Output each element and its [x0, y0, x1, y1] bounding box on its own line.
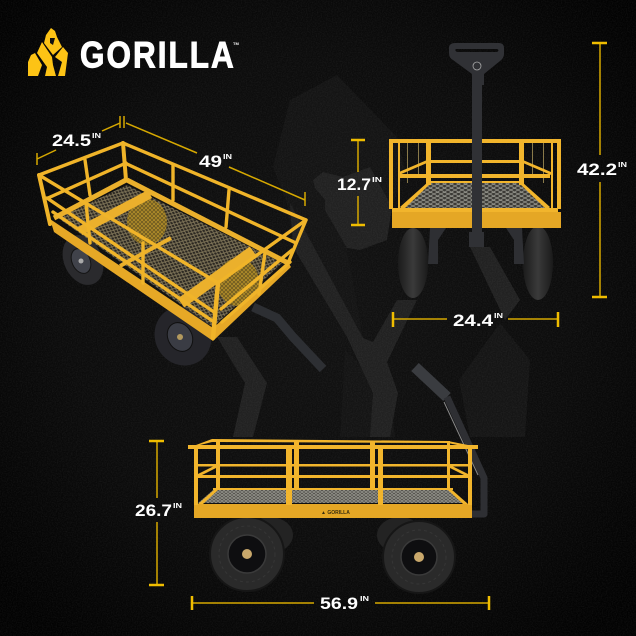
deck mesh — [403, 183, 548, 210]
dimension lines — [37, 43, 607, 610]
mesh deck — [58, 185, 282, 327]
back wheels — [247, 517, 293, 553]
label: 12.7 in: IN — [372, 177, 382, 184]
label: 24.4 in — [453, 311, 503, 330]
dim: 12.7 — [351, 140, 365, 225]
frame — [389, 139, 561, 228]
gorilla silhouette watermark — [217, 75, 530, 437]
wheels seen through mesh — [127, 199, 167, 245]
icon: gorilla — [28, 28, 68, 76]
measurement labels — [52, 131, 627, 613]
label: 12.7 in: 12.7 — [337, 175, 371, 194]
deck mesh — [198, 490, 467, 503]
rails — [188, 439, 478, 505]
label: 24.5 in: IN — [92, 133, 101, 140]
dim: 24.5 width — [37, 116, 120, 165]
front wheels — [210, 517, 455, 593]
dim: 26.7 — [149, 441, 164, 585]
label: 42.2 in: 42.2 — [577, 160, 617, 179]
logo — [28, 28, 239, 76]
side-view wagon — [188, 367, 484, 593]
bed side panel — [194, 504, 472, 518]
axle brackets — [428, 228, 524, 264]
dim: 24.4 — [393, 312, 558, 327]
pull handle — [253, 307, 323, 369]
bed logo: ▲ GORILLA — [321, 510, 350, 516]
dim: 49 length — [124, 116, 305, 206]
logo: TM — [233, 41, 239, 46]
dim: 42.2 — [592, 43, 607, 297]
pull handle — [415, 367, 484, 514]
label: 49 in: 49 — [199, 152, 222, 171]
deck frame — [54, 180, 288, 303]
label: 26.7 in: 26.7 — [135, 501, 172, 520]
front-view wagon — [389, 43, 561, 300]
label: 24.4 in: IN — [494, 313, 503, 320]
rails — [39, 143, 306, 338]
handle — [449, 43, 504, 247]
label: 56.9 in: IN — [360, 596, 369, 603]
label: 24.5 in: 24.5 — [52, 131, 91, 150]
label: 49 in: IN — [223, 154, 232, 161]
label: 42.2 in: IN — [618, 162, 627, 169]
wheels — [55, 228, 222, 376]
label: 26.7 in: IN — [173, 503, 182, 510]
deck side band — [50, 219, 291, 341]
wordmark: GORILLA — [80, 35, 236, 76]
label: 42.2 in — [577, 160, 627, 179]
label: 49 in — [199, 152, 232, 171]
dim: 56.9 — [192, 596, 489, 610]
label: 56.9 in — [320, 594, 369, 613]
label: 24.5 in — [52, 131, 101, 150]
wheels — [398, 228, 428, 298]
isometric wagon — [39, 143, 323, 376]
label: 56.9 in: 56.9 — [320, 594, 358, 613]
label: 24.4 in: 24.4 — [453, 311, 494, 330]
